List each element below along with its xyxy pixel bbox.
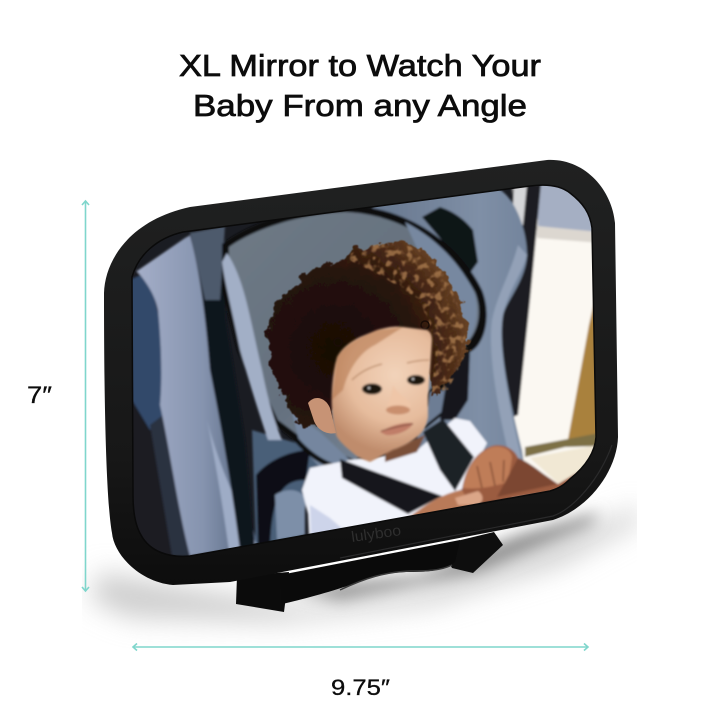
right strap [440,532,503,573]
far left dark side [130,270,190,556]
baby face [332,327,432,462]
hairline shadow [332,327,403,400]
ground shadow [90,508,640,622]
eyes [362,384,382,394]
label: height: 7″ [27,382,53,409]
shirt [302,418,487,537]
mirror stand [236,532,503,612]
arrow: width dimension [133,644,588,650]
dark channel [189,232,255,550]
baby ear [308,398,336,434]
mirror frame [104,160,618,585]
belt: shoulder right [423,419,474,491]
photo background [236,370,309,534]
inner strip of headrest [222,253,282,440]
belt: shoulder left [340,459,442,514]
title: Baby From any Angle [193,88,527,123]
mirror glass photo [125,175,605,565]
fingers [455,491,482,505]
stand base [280,540,460,604]
mouth [380,423,413,435]
window view [512,180,602,500]
hair highlights [345,244,468,392]
frame bottom highlight [340,445,612,558]
left strap [236,572,289,612]
frame inner rim [132,185,596,556]
dark shoulder tab [422,207,478,280]
lower headrest wing [292,414,350,466]
baby hair [268,241,469,425]
hand [461,444,578,503]
nose [388,385,411,412]
eyebrows [352,360,429,380]
title: XL Mirror to Watch Your [179,48,541,83]
label: width: 9.75″ [331,675,390,700]
headrest fill [229,212,479,460]
dark space behind baby [440,352,470,420]
brand logo: lulyboo [350,522,402,546]
headrest border [222,205,487,470]
arm: lower [409,489,474,516]
lower seat pad [250,429,320,542]
side wing of seat [370,187,527,510]
title [179,48,541,123]
left bolster [137,232,258,556]
arrow: height dimension [82,201,89,591]
window pillar [500,184,541,420]
baby neck shadow [385,435,425,462]
